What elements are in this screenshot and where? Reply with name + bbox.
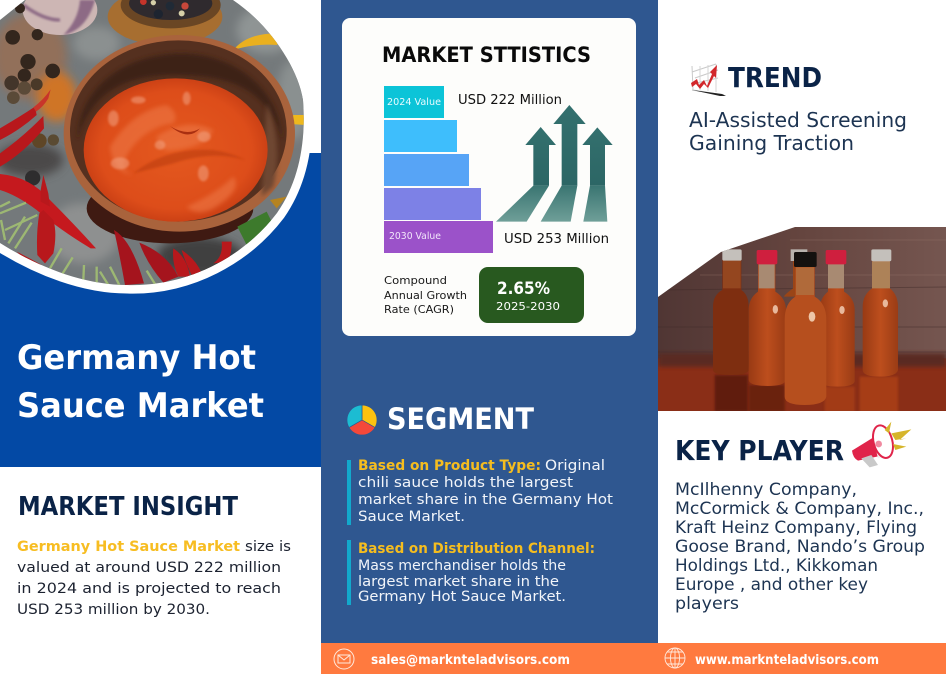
callout: CAGR value (479, 267, 584, 323)
label: compound annual growth rate: Rate (CAGR) (384, 303, 454, 316)
left bottle (713, 260, 749, 375)
text block: key player list: players (675, 594, 739, 613)
yellow pepper (236, 34, 278, 48)
chilies (0, 89, 232, 285)
text block: market insight body: Germany Hot Sauce Market (17, 539, 240, 555)
photo: bowl of hot sauce with spices (0, 0, 320, 293)
text block: distribution channel segment: Based on Distribution Channel: (358, 541, 595, 557)
text block: key player list: McIlhenny Company, (675, 480, 857, 499)
text: website address: www.marknteladvisors.com (695, 653, 879, 668)
table (658, 358, 946, 412)
text: email address: sales@marknteladvisors.com (371, 653, 570, 668)
text block: market insight body: valued at around USD 222 million (17, 560, 281, 576)
label: compound annual growth rate: Compound (384, 274, 447, 287)
text block: trend description: Gaining Traction (689, 131, 854, 155)
label: compound annual growth rate: Annual Growth (384, 289, 467, 302)
label: 2030 value: USD 253 Million (504, 232, 609, 247)
icon: globe (665, 648, 685, 668)
heading: market insight: MARKET INSIGHT (18, 492, 238, 522)
bowl shadow (86, 197, 254, 244)
green leaf (237, 212, 272, 245)
text block: product type segment: market share in the Germany Hot (358, 492, 614, 508)
panel: key player (675, 422, 925, 613)
panel: left title block (0, 153, 321, 467)
panel: market insight (17, 492, 291, 618)
second bottle (749, 263, 786, 386)
bar chart: stepped market value bars: 2024 Value (387, 97, 441, 108)
text block: distribution channel segment: largest market share in the (358, 574, 559, 590)
icon: rising chart (691, 64, 726, 96)
text block: distribution channel segment (347, 540, 595, 605)
heading: market statistics: MARKET STTISTICS (382, 43, 591, 67)
panel: trend (689, 61, 907, 155)
text block: key player list (675, 480, 925, 613)
photo: hot sauce bottles on wooden table (658, 227, 946, 412)
fourth bottle (821, 288, 855, 387)
icon: megaphone (852, 422, 911, 467)
pepper pot (108, 0, 222, 45)
garlic (23, 0, 97, 35)
text block: distribution channel segment: Germany Hot Sauce Market. (358, 589, 566, 605)
panel: center column background (321, 0, 658, 643)
label: compound annual growth rate (384, 274, 467, 316)
sauce (84, 78, 268, 222)
bar chart: stepped market value bars: 2030 Value (389, 231, 441, 242)
text block: trend description: AI-Assisted Screening (689, 108, 907, 132)
icon: email (334, 649, 354, 669)
text block: product type segment (347, 458, 614, 525)
text block: distribution channel segment: Mass merchandiser holds the (358, 558, 566, 574)
text block: key player list: Holdings Ltd., Kikkoman (675, 556, 878, 575)
text block: market insight body: USD 253 million by 2030. (17, 602, 210, 618)
right bottle (863, 261, 898, 377)
text block: key player list: Goose Brand, Nando’s Group (675, 537, 925, 556)
text block: key player list: Kraft Heinz Company, Flying (675, 518, 917, 537)
callout: CAGR value: 2025-2030 (496, 300, 560, 313)
bowl (64, 35, 295, 232)
text block: market insight body: size is (245, 539, 291, 555)
heading: trend: TREND (728, 61, 822, 94)
title (17, 338, 264, 426)
callout: CAGR value: 2.65% (497, 279, 550, 299)
heading: segment: SEGMENT (387, 402, 534, 436)
bar chart: stepped market value bars (384, 86, 493, 253)
peppercorns (4, 3, 60, 186)
title: Sauce Market (17, 386, 264, 426)
label: 2024 value: USD 222 Million (458, 93, 562, 108)
text block: trend description (689, 108, 907, 155)
text block: product type segment: Original (545, 458, 605, 474)
text block: market insight body: in 2024 and is projected to reach (17, 581, 281, 597)
text block: product type segment: Based on Product Type: (358, 458, 541, 474)
heading: key player: KEY PLAYER (675, 434, 844, 467)
text block: market insight body (17, 539, 291, 618)
text block: product type segment: Sauce Market. (358, 509, 465, 525)
text block: product type segment: chili sauce holds the largest (358, 475, 574, 491)
panel: segment (347, 402, 614, 605)
text block: key player list: McCormick & Company, Inc., (675, 499, 924, 518)
panel: market statistics card (342, 18, 636, 336)
herb stems (0, 202, 155, 285)
front bottle (785, 267, 826, 405)
title: Germany Hot (17, 338, 256, 378)
panel: footer contact bar (321, 643, 946, 674)
back bottle (784, 261, 796, 297)
icon: rising arrows (496, 105, 613, 222)
icon: pie chart (347, 405, 377, 435)
text block: key player list: Europe , and other key (675, 575, 868, 594)
